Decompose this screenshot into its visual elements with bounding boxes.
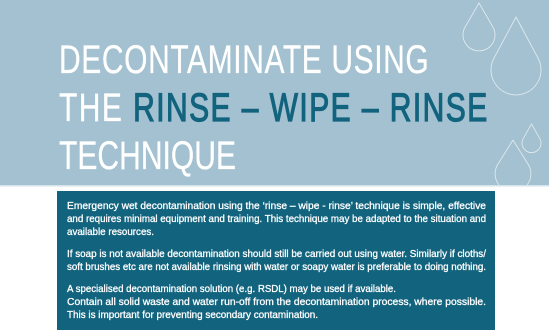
paragraph: soap and water bbox=[67, 249, 486, 273]
paragraph: technique summary: and requires minimal equipment and training. This technique may be adapted to the situation and bbox=[67, 214, 486, 225]
paragraph: specialised solution and waste: This is important for preventing secondary contamination. bbox=[67, 310, 318, 321]
title line 1: DECONTAMINATE USING bbox=[59, 38, 429, 82]
text panel bbox=[57, 191, 495, 330]
paragraph: technique summary: Emergency wet decontamination using the ‘rinse – wipe - rinse’ technique is simple, effective bbox=[67, 201, 486, 212]
icon: water drops bbox=[463, 3, 541, 185]
icon: drop large bbox=[491, 17, 541, 95]
icon: drop small bbox=[522, 124, 541, 153]
title line 2: THE RINSE – WIPE – RINSE bbox=[59, 86, 487, 130]
icon: drop top left bbox=[463, 3, 495, 51]
paragraph: technique summary: available resources. bbox=[67, 227, 154, 238]
paragraph: technique summary bbox=[67, 201, 486, 238]
icon: drop bottom bbox=[495, 140, 531, 185]
paragraph: specialised solution and waste: Contain all solid waste and water run-off from the decontamination process, where possible. bbox=[67, 297, 486, 308]
paragraph: soap and water: If soap is not available decontamination should still be carried out using water. Similarly if cloths/ bbox=[67, 249, 486, 260]
paragraph: specialised solution and waste: A specialised decontamination solution (e.g. RSDL) may be used if available. bbox=[67, 284, 396, 295]
title bbox=[59, 38, 487, 178]
title line 3: TECHNIQUE bbox=[59, 134, 236, 178]
paragraph: specialised solution and waste bbox=[67, 284, 486, 321]
paragraph: soap and water: soft brushes etc are not available rinsing with water or soapy water is preferable to doing nothing. bbox=[67, 262, 486, 273]
header panel bbox=[0, 0, 549, 186]
